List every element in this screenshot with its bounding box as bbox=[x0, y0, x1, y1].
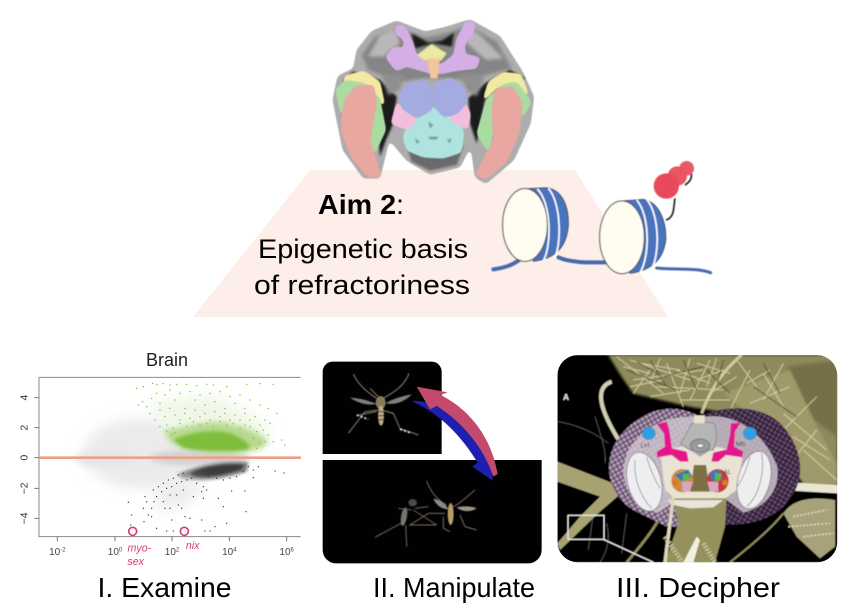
caption: manipulate: II. Manipulate bbox=[373, 572, 535, 603]
suboesophageal teal bbox=[403, 105, 464, 158]
x axis labels bbox=[49, 547, 295, 558]
brain inner grey tissue bbox=[362, 26, 512, 82]
aim description line 2: of refractoriness bbox=[254, 270, 470, 300]
right optic lobe bbox=[736, 450, 772, 510]
aim heading: Aim 2: bbox=[318, 189, 404, 220]
central complex orange bbox=[427, 58, 440, 78]
black hair lines bbox=[558, 417, 627, 562]
nucleosome one bbox=[503, 188, 568, 261]
left magenta mushroom body bbox=[657, 422, 689, 462]
y axis labels: −2 bbox=[19, 482, 30, 494]
right palp bbox=[783, 499, 835, 558]
central complex yellow bbox=[417, 44, 447, 63]
right lobe yellow bbox=[482, 72, 530, 103]
zero line bbox=[39, 454, 301, 462]
inset box bbox=[568, 515, 604, 539]
caption: decipher: III. Decipher bbox=[616, 572, 780, 603]
x axis labels: 6 bbox=[291, 547, 295, 553]
left compound eye bbox=[609, 409, 697, 527]
proboscis base bbox=[665, 498, 727, 562]
small pink lobes left bbox=[391, 102, 417, 131]
x axis labels: 10 bbox=[222, 547, 233, 558]
gene markers bbox=[129, 527, 188, 535]
x axis labels: 10 bbox=[279, 547, 291, 558]
region labels bbox=[641, 441, 746, 476]
right compound eye bbox=[703, 408, 800, 524]
teal texture bbox=[415, 122, 452, 144]
y axis labels: 4 bbox=[19, 395, 30, 401]
x axis labels: 2 bbox=[176, 547, 180, 553]
central grey lobe bbox=[681, 422, 717, 450]
y axis labels: 2 bbox=[19, 425, 30, 431]
brain central dark shading bbox=[412, 33, 454, 48]
aim description line 1: Epigenetic basis bbox=[258, 234, 468, 264]
region labels: LH bbox=[641, 442, 649, 449]
lower photo bbox=[323, 460, 542, 563]
left blue lobe bbox=[642, 427, 655, 440]
top notch bbox=[694, 415, 705, 423]
DNA strand bbox=[493, 257, 711, 273]
x axis labels: -2 bbox=[60, 547, 66, 553]
grey scatter cloud bbox=[75, 418, 250, 488]
y axis labels bbox=[19, 395, 30, 524]
axis ticks bbox=[34, 398, 287, 541]
brain outer outline bbox=[333, 19, 534, 184]
plot title: Brain bbox=[146, 350, 188, 370]
lower right hair bbox=[730, 513, 783, 562]
brain illustration bbox=[333, 19, 534, 184]
brain upper lighter folds bbox=[368, 28, 503, 60]
right lobe green bbox=[477, 82, 532, 153]
right lobe red bbox=[475, 87, 523, 179]
blue arrow bbox=[413, 401, 493, 481]
gene labels: myo- bbox=[127, 543, 152, 555]
background trapezoid bbox=[193, 170, 668, 317]
upper photo bbox=[323, 362, 442, 454]
antennal lobe right blue bbox=[433, 77, 467, 117]
panel: mosquito head micrograph bbox=[557, 355, 837, 563]
x axis labels: 4 bbox=[233, 547, 237, 553]
right blue lobe bbox=[743, 427, 757, 440]
brain central grey bbox=[382, 75, 485, 97]
gene labels bbox=[127, 540, 200, 568]
left lobe green bbox=[335, 80, 386, 153]
brain right gap bbox=[468, 70, 525, 143]
red arrow bbox=[417, 387, 498, 477]
panel letter: A bbox=[563, 392, 569, 402]
head overlay bbox=[623, 416, 778, 513]
central brown subesophageal bbox=[690, 465, 710, 492]
small pink lobes right bbox=[448, 102, 471, 130]
panel: scatter plot bbox=[19, 350, 301, 568]
inset line bbox=[603, 539, 653, 562]
right antennal lobe bbox=[707, 469, 729, 492]
region labels: Mb bbox=[736, 441, 746, 448]
brain left gap bbox=[343, 72, 397, 157]
central pale brain region bbox=[660, 447, 743, 500]
nucleosomes illustration bbox=[493, 161, 711, 274]
x axis labels: 10 bbox=[49, 547, 60, 558]
left antenna bbox=[557, 462, 625, 550]
region labels: AL bbox=[723, 469, 732, 476]
upper thorax bbox=[608, 355, 837, 487]
right magenta mushroom body bbox=[711, 423, 743, 462]
y axis labels: −4 bbox=[19, 512, 30, 524]
brain lower tissue bbox=[407, 147, 463, 171]
right antenna bbox=[794, 482, 838, 494]
caption: examine: I. Examine bbox=[98, 572, 232, 603]
left lobe red bbox=[341, 85, 382, 177]
nucleosome two bbox=[600, 199, 666, 274]
green scatter bbox=[137, 383, 285, 453]
left optic lobe bbox=[626, 452, 663, 512]
x axis labels: 0 bbox=[119, 547, 123, 553]
left lobe yellow bbox=[344, 71, 385, 107]
left antennal lobe bbox=[671, 469, 693, 492]
x axis labels: 10 bbox=[108, 547, 119, 558]
x axis labels: 10 bbox=[165, 547, 176, 558]
y axis labels: 0 bbox=[19, 455, 30, 461]
histone tail bbox=[666, 173, 691, 220]
panel: mosquito photos bbox=[323, 362, 542, 563]
gene labels: sex bbox=[127, 556, 145, 568]
gene labels: nix bbox=[186, 540, 200, 552]
mushroom body purple bbox=[385, 21, 481, 74]
hair texture bbox=[601, 355, 837, 480]
antennal lobe left blue bbox=[398, 79, 433, 119]
micrograph photo bbox=[557, 355, 837, 563]
plot frame bbox=[39, 377, 301, 537]
black scatter bbox=[128, 462, 284, 531]
methyl groups bbox=[654, 161, 694, 199]
